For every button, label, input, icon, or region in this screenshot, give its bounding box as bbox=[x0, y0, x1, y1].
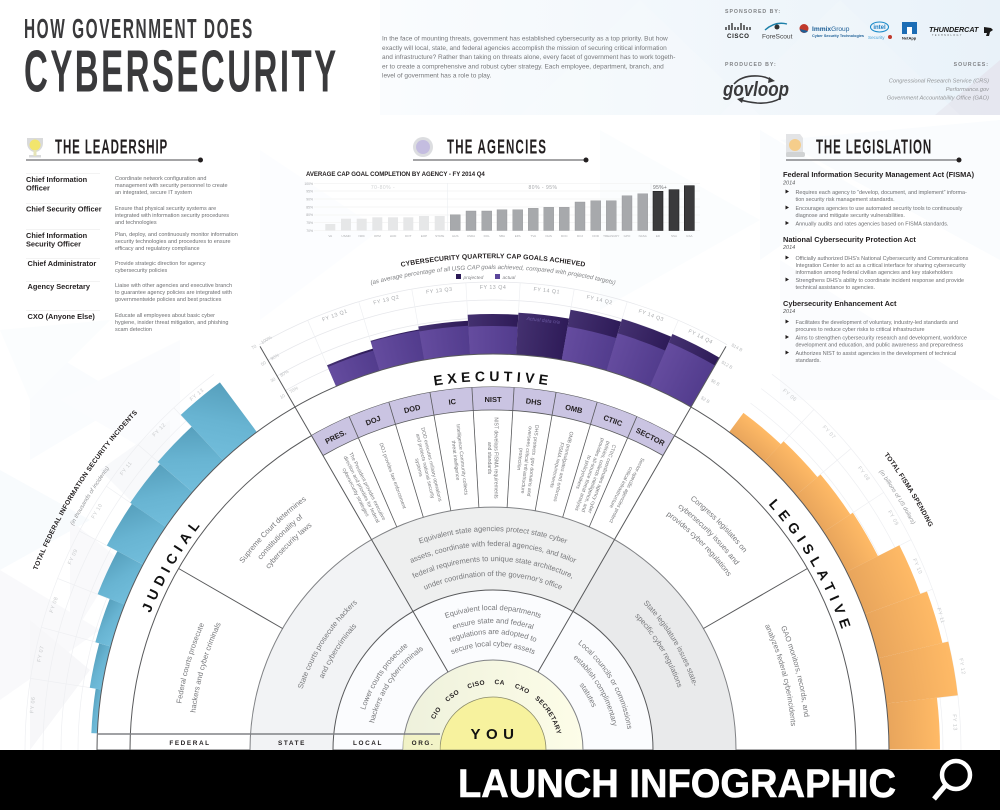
text: executive state: federal requirements to unique state architecture, bbox=[412, 556, 572, 579]
text: congress: Congress legislates on bbox=[691, 496, 746, 552]
heading: judicial: JUDICIAL bbox=[142, 524, 200, 612]
executive agency descriptions: and protects national security bbox=[414, 433, 435, 499]
executive agency descriptions: Intelligence Community collects bbox=[454, 424, 469, 496]
executive agency descriptions: DHS protects .gov domains and bbox=[525, 425, 540, 497]
leadership row: chief information security officer: Chief Information bbox=[26, 231, 88, 240]
bar chart: average cap goal completion: 70% bbox=[306, 229, 313, 233]
bar chart: average cap goal completion: 75% bbox=[306, 221, 313, 225]
act: fisma: 2014 bbox=[782, 180, 795, 186]
branch headings bbox=[142, 371, 850, 629]
sources: Government Accountability Office (GAO) bbox=[887, 96, 989, 102]
judicial year labels: FY 09 bbox=[67, 548, 79, 566]
judicial year labels: FY 06 bbox=[29, 696, 37, 713]
bar chart: average cap goal completion: 90% bbox=[306, 198, 313, 202]
bar chart: average cap goal completion: 95%+ bbox=[653, 185, 667, 191]
chart title: total federal information security incidents: TOTAL FEDERAL INFORMATION SECURITY INCIDENTS bbox=[32, 410, 137, 569]
intro paragraph: In the face of mounting threats, government has established cybersecurity as a top priority. But how bbox=[382, 36, 668, 42]
bar chart: average cap goal completion: DOL bbox=[484, 234, 490, 238]
judicial year labels: FY 13 bbox=[189, 387, 206, 403]
act: cybersecurity enhancement: development and education, and public awareness and preparedness bbox=[796, 342, 964, 348]
executive agency cell labels: DHS bbox=[525, 396, 542, 407]
quarter labels: FY 13 Q2 bbox=[373, 294, 400, 306]
leadership row: chief administrator bbox=[28, 259, 206, 274]
bar chart: average cap goal completion: NRC bbox=[358, 234, 366, 238]
text: state legislature: State legislature issues state- bbox=[644, 600, 696, 686]
axis labels bbox=[250, 335, 743, 406]
logo: thundercat bbox=[929, 25, 993, 37]
executive agency cell labels: SECTOR bbox=[634, 426, 667, 448]
axis labels: 70% bbox=[289, 385, 299, 394]
bar chart: average cap goal completion: VA bbox=[328, 234, 332, 238]
leadership row: cxo: hygiene, insider threat mitigation, and phishing bbox=[115, 320, 228, 326]
quarter labels: FY 14 Q4 bbox=[687, 329, 714, 346]
act: cybersecurity enhancement: Facilitates the development of voluntary, industry-led standards and bbox=[796, 320, 958, 326]
chart title: cybersecurity quarterly cap goals achieved: CYBERSECURITY QUARTERLY CAP GOALS ACHIEVED bbox=[400, 254, 585, 266]
bar chart: average cap goal completion: EOP bbox=[421, 234, 427, 238]
heading: the agencies: THE AGENCIES bbox=[447, 135, 547, 158]
executive agency descriptions: critical infrastructure bbox=[608, 466, 633, 509]
bar chart: average cap goal completion: USAID bbox=[341, 234, 351, 238]
sources: Performance.gov bbox=[946, 87, 990, 93]
bar chart: average cap goal completion: SSA bbox=[671, 234, 677, 238]
act: cybersecurity enhancement: Aims to strengthen cybersecurity research and development, workforce bbox=[796, 336, 967, 342]
organization role labels: CISO bbox=[468, 680, 484, 688]
executive agency descriptions: CTIIC coordinates agency cyber bbox=[586, 443, 617, 514]
logo: thundercat: TECHNOLOGY bbox=[932, 34, 963, 37]
quarter labels: FY 14 Q3 bbox=[637, 308, 665, 323]
executive agency descriptions: Sector-specific agencies protect bbox=[607, 457, 645, 524]
axis labels: $12 B bbox=[720, 360, 733, 370]
bar chart: average cap goal completion: SBA bbox=[499, 234, 505, 238]
leadership row: chief security officer bbox=[26, 204, 229, 226]
text: lower courts: hackers and cybercriminals bbox=[368, 647, 423, 723]
quarter labels: FY 13 Q1 bbox=[321, 308, 349, 323]
bar chart: average cap goal completion: NASA bbox=[639, 234, 647, 238]
leadership row: chief administrator: Provide strategic direction for agency bbox=[115, 261, 206, 267]
organization role labels: SECRETARY bbox=[533, 695, 562, 736]
logo: thundercat: THUNDERCAT bbox=[929, 25, 979, 34]
leadership row: agency secretary bbox=[28, 282, 232, 303]
chart: total federal information security incidents (blue) bbox=[89, 382, 260, 734]
quarter labels: FY 13 Q4 bbox=[480, 285, 506, 291]
level labels: LOCAL bbox=[353, 740, 383, 747]
leadership row: chief information officer: Chief Information bbox=[26, 175, 88, 184]
judicial year labels: FY 12 bbox=[152, 422, 167, 438]
text: local councils: establish complimentary bbox=[574, 656, 616, 726]
bar chart: average cap goal completion: 85% bbox=[306, 206, 313, 210]
bar chart: average cap goal completion: AVERAGE CAP GOAL COMPLETION BY AGENCY - FY 2014 Q4 bbox=[306, 171, 485, 178]
chart title: cybersecurity quarterly cap goals achieved: (as average percentage of all USG CAP goals achieved, compared with projected targets) bbox=[370, 264, 616, 286]
quarter labels: FY 14 Q1 bbox=[533, 287, 560, 296]
actual bars bbox=[328, 325, 715, 408]
leadership row: chief security officer: Chief Security Officer bbox=[26, 204, 102, 214]
text: executive local: regulations are adopted to bbox=[450, 630, 536, 642]
axis labels: $2 B bbox=[700, 395, 711, 404]
sources: SOURCES: bbox=[954, 62, 989, 68]
sources: Congressional Research Service (CRS) bbox=[889, 78, 989, 84]
text: gao bbox=[765, 624, 810, 726]
chart: quarterly cap goals (purple) bbox=[250, 285, 743, 409]
logo: immixgroup: ImmixGroup bbox=[812, 26, 850, 33]
text: federal courts bbox=[176, 622, 220, 712]
produced by: PRODUCED BY: bbox=[725, 62, 777, 68]
leadership row: cxo: scam detection bbox=[115, 327, 152, 333]
bar chart: average cap goal completion: DOT bbox=[405, 234, 412, 238]
bar chart: average cap goal completion: GSA bbox=[686, 234, 692, 238]
bar chart: average cap goal completion: USDA bbox=[467, 234, 475, 238]
sponsors bbox=[725, 9, 993, 40]
heading: executive: EXECUTIVE bbox=[434, 371, 548, 386]
organization ring bbox=[403, 660, 583, 750]
logo: intel security bbox=[868, 22, 892, 40]
level labels: FEDERAL bbox=[169, 740, 211, 747]
text: lower courts: Lower courts prosecute bbox=[360, 644, 408, 710]
executive agency label band bbox=[312, 387, 674, 456]
bar chart: average cap goal completion: DOC bbox=[561, 234, 568, 238]
chart title: total fisma spending: (in billions of US dollars) bbox=[878, 470, 916, 524]
chart title: cybersecurity quarterly cap goals achieved bbox=[370, 254, 616, 286]
judicial year labels: FY 11 bbox=[119, 461, 134, 477]
executive agency cell labels: NIST bbox=[484, 395, 502, 404]
chart: quarterly cap goals (purple): Actual data n/a bbox=[525, 316, 560, 326]
act: cybersecurity enhancement: 2014 bbox=[782, 309, 795, 315]
text: supreme court: constitutionality of bbox=[258, 514, 302, 560]
legend: projected and actual bbox=[456, 274, 516, 281]
bar chart: average cap goal completion: EPA bbox=[515, 234, 521, 238]
organization role labels: CXO bbox=[514, 683, 531, 696]
government rings bbox=[97, 354, 889, 750]
logo: forescout: ForeScout bbox=[762, 34, 793, 40]
axis labels: 100% bbox=[260, 335, 273, 345]
dividers bbox=[97, 346, 807, 734]
act: national cybersecurity protection: information among federal civilian agencies and key stakeholders bbox=[796, 270, 953, 276]
heading: legislative: LEGISLATIVE bbox=[768, 498, 850, 629]
leadership row: chief security officer: integrated with information security procedures bbox=[115, 213, 229, 219]
executive agency descriptions: oversees critical infrastructure bbox=[519, 426, 533, 494]
heading: the leadership: THE LEADERSHIP bbox=[55, 135, 168, 158]
bar chart: average cap goal completion: HHS bbox=[452, 234, 458, 238]
logo: netapp: NetApp bbox=[902, 36, 917, 40]
executive agency descriptions: policies, collects intelligence, and bbox=[580, 440, 611, 513]
you circle bbox=[440, 697, 546, 750]
text: supreme court: Supreme Court determines bbox=[240, 497, 306, 563]
bar chart: average cap goal completion: 95% bbox=[306, 190, 313, 194]
executive agency descriptions: to policymakers bbox=[574, 454, 592, 490]
executive agency cell labels: CTIIC bbox=[602, 413, 624, 428]
leadership row: agency secretary: to guarantee agency policies are integrated with bbox=[115, 290, 232, 296]
level labels: ORG. bbox=[412, 740, 434, 747]
bar chart: average cap goal completion bbox=[304, 171, 700, 238]
executive agency descriptions: NIST develops FISMA requirements bbox=[492, 417, 498, 499]
text: local councils: Local councils or commissions bbox=[578, 640, 632, 729]
act: cybersecurity enhancement: Authorizes NIST to assist agencies in the development of technical bbox=[796, 351, 956, 357]
panel: the legislation bbox=[782, 134, 975, 364]
title: CYBERSECURITY bbox=[24, 40, 339, 105]
logo: intel security: Security bbox=[868, 35, 885, 40]
act: national cybersecurity protection: 2014 bbox=[782, 245, 795, 251]
act: fisma: diagnose and mitigate security vulnerabilities. bbox=[796, 213, 905, 219]
leadership row: cxo: Educate all employees about basic cyber bbox=[115, 313, 215, 319]
text: executive state: Equivalent state agencies protect state cyber bbox=[418, 526, 568, 544]
leadership row: chief administrator: cybersecurity policies bbox=[115, 268, 168, 274]
icon: scroll bbox=[786, 134, 805, 157]
judicial year labels: FY 07 bbox=[36, 645, 46, 663]
leadership row: chief information officer bbox=[26, 175, 228, 196]
panel: the leadership bbox=[26, 135, 238, 333]
executive agency cell labels bbox=[324, 395, 667, 448]
executive agency descriptions: DOD executes military operations bbox=[419, 427, 443, 503]
act: fisma: Encourages agencies to use automated security tools to continuously bbox=[796, 206, 963, 212]
legislative year labels bbox=[781, 388, 966, 731]
executive agency cell labels: DOJ bbox=[364, 414, 382, 428]
text: executive local: secure local cyber assets bbox=[451, 640, 535, 654]
bar chart: average cap goal completion: DOJ bbox=[577, 234, 584, 238]
act: fisma: tion security risk management standards. bbox=[796, 197, 895, 203]
judicial year labels bbox=[29, 387, 206, 713]
text: congress: provides cyber regulations bbox=[666, 512, 730, 576]
executive agency cell labels: PRES. bbox=[324, 428, 348, 446]
act: cybersecurity enhancement: standards. bbox=[796, 358, 821, 364]
leadership row: chief information security officer bbox=[26, 231, 238, 252]
leadership row: chief information officer: Coordinate network configuration and bbox=[115, 176, 206, 182]
axis labels: 50 bbox=[260, 360, 267, 367]
legislative year labels: FY 10 bbox=[911, 558, 923, 575]
panel: the agencies bbox=[304, 135, 700, 238]
local ring bbox=[333, 590, 653, 750]
sources bbox=[887, 62, 990, 102]
logo: forescout bbox=[762, 23, 793, 40]
state ring bbox=[250, 507, 736, 750]
executive agency descriptions: protection bbox=[515, 448, 524, 471]
bar chart: average cap goal completion: 100% bbox=[304, 182, 313, 186]
executive agency descriptions: DOJ provides law enforcement bbox=[377, 442, 407, 510]
leadership row: chief security officer: Ensure that physical security systems are bbox=[115, 206, 216, 212]
quarter labels bbox=[321, 285, 714, 346]
you label: YOU bbox=[470, 726, 520, 743]
chart title: total federal information security incidents: (in thousands of incidents) bbox=[70, 466, 110, 526]
executive agency descriptions: systems bbox=[413, 458, 424, 478]
leadership row: cxo bbox=[28, 312, 228, 333]
text: gao: GAO monitors, records, and bbox=[782, 626, 810, 717]
leadership row: chief information officer: Officer bbox=[26, 184, 50, 192]
bar chart: average cap goal completion: 80% - 95% bbox=[529, 185, 558, 191]
text: federal courts: Federal courts prosecute bbox=[176, 623, 204, 704]
text: local councils: statutes bbox=[580, 683, 596, 708]
executive agency descriptions bbox=[336, 417, 645, 528]
chart grids bbox=[25, 282, 961, 750]
executive agency cell labels: OMB bbox=[564, 403, 584, 415]
act: national cybersecurity protection bbox=[782, 235, 969, 291]
act: cybersecurity enhancement bbox=[782, 299, 967, 364]
text: executive state: assets, coordinate with federal agencies, and tailor bbox=[410, 540, 576, 563]
bar chart: average cap goal completion: STATE bbox=[435, 234, 444, 238]
leadership row: chief information officer: an integrated, secure IT system bbox=[115, 190, 192, 196]
organization role labels: CA bbox=[494, 680, 504, 685]
legend: projected and actual: projected bbox=[462, 275, 484, 281]
act: national cybersecurity protection: National Cybersecurity Protection Act bbox=[783, 235, 916, 244]
legislative year labels: FY 09 bbox=[886, 510, 899, 527]
act: cybersecurity enhancement: Cybersecurity Enhancement Act bbox=[783, 299, 897, 308]
produced by bbox=[722, 62, 789, 103]
act: fisma: Annually audits and rates agencies based on FISMA standards. bbox=[796, 222, 949, 228]
executive agency descriptions: direction and priorities for federal bbox=[342, 455, 380, 524]
act: fisma bbox=[782, 170, 975, 228]
bar chart: average cap goal completion: DOD bbox=[592, 234, 600, 238]
intro paragraph: and infrastructure? Rather than taking on threats alone, every facet of government has to work togeth- bbox=[382, 54, 675, 61]
act: national cybersecurity protection: technical assistance to agencies. bbox=[796, 285, 875, 291]
bar chart: average cap goal completion: TREASURY bbox=[603, 234, 619, 238]
executive agency descriptions: OMB promulgates and enforces bbox=[551, 431, 574, 503]
text: executive local bbox=[444, 604, 541, 654]
act: national cybersecurity protection: Strengthens DHS's ability to coordinate incident response and provide bbox=[796, 278, 964, 284]
leadership row: chief information security officer: Security Officer bbox=[26, 240, 81, 248]
logo: netapp bbox=[902, 22, 917, 40]
leadership row: chief information security officer: Plan, deploy, and continuously monitor information bbox=[115, 232, 238, 238]
axis labels: 70 bbox=[250, 343, 258, 350]
radial diagram bbox=[24, 254, 966, 750]
title: HOW GOVERNMENT DOES bbox=[24, 13, 254, 44]
executive agency descriptions: FISMA requirements bbox=[548, 442, 565, 489]
leadership row: chief information officer: management with security personnel to create bbox=[115, 183, 228, 189]
text: executive local: Equivalent local departments bbox=[444, 604, 541, 618]
quarter labels: FY 14 Q2 bbox=[586, 294, 613, 306]
heading: the legislation: THE LEGISLATION bbox=[816, 135, 932, 158]
axis labels: 90% bbox=[270, 352, 280, 361]
logo: immixgroup bbox=[800, 24, 864, 38]
leadership row: chief information security officer: efficacy and regulatory compliance bbox=[115, 246, 200, 252]
legislative year labels: FY 13 bbox=[951, 714, 958, 731]
launch bar bbox=[0, 750, 1000, 810]
axis labels: 30 bbox=[269, 376, 277, 383]
icon: magnifier bbox=[934, 761, 970, 799]
sponsors: SPONSORED BY: bbox=[725, 9, 781, 15]
intro paragraph: level of government has a role to play. bbox=[382, 72, 492, 80]
axis labels: 80% bbox=[279, 369, 290, 378]
legislative year labels: FY 07 bbox=[821, 424, 837, 441]
judicial year labels: FY 10 bbox=[91, 503, 104, 520]
text: executive local: ensure state and federal bbox=[452, 618, 534, 630]
axis labels: $6 B bbox=[710, 378, 721, 387]
text: congress bbox=[666, 496, 746, 576]
intro paragraph: exactly will local, state, and federal agencies accomplish the mission of securing critical information bbox=[382, 45, 667, 52]
leadership row: agency secretary: Agency Secretary bbox=[28, 282, 91, 291]
chart title: total fisma spending: TOTAL FISMA SPENDING bbox=[885, 452, 933, 526]
leadership row: cxo: CXO (Anyone Else) bbox=[28, 312, 95, 321]
axis labels: 10 bbox=[279, 393, 286, 400]
logo: cisco bbox=[726, 23, 750, 40]
executive agency descriptions: threat intelligence bbox=[450, 440, 460, 481]
chart: total fisma spending (orange) bbox=[728, 412, 959, 753]
quarter labels: FY 13 Q3 bbox=[426, 287, 453, 296]
text: supreme court: cybersecurity laws bbox=[266, 524, 312, 568]
logo: govloop: govloop bbox=[722, 79, 789, 101]
logo: immixgroup: Cyber Security Technologies bbox=[812, 34, 864, 38]
legislative year labels: FY 06 bbox=[781, 388, 798, 403]
organization role labels: CSO bbox=[446, 690, 458, 702]
bar chart: average cap goal completion: DHS bbox=[546, 234, 552, 238]
text: gao: analyzes federal cyberincidents bbox=[765, 624, 796, 726]
projected bars bbox=[327, 309, 720, 409]
legislative year labels: FY 12 bbox=[957, 658, 966, 675]
executive agency descriptions: and standards bbox=[486, 442, 492, 475]
act: fisma: Federal Information Security Management Act (FISMA) bbox=[783, 170, 975, 179]
bar chart: average cap goal completion: 80% bbox=[306, 213, 313, 217]
bar chart: average cap goal completion: TVA bbox=[530, 234, 536, 238]
executive agency cell labels: IC bbox=[448, 397, 457, 407]
text: congress: cybersecurity issues and bbox=[678, 504, 740, 565]
leadership row: agency secretary: Liaise with other agencies and executive branch bbox=[115, 283, 232, 289]
bar chart: average cap goal completion: OPM bbox=[374, 234, 381, 238]
level labels: STATE bbox=[278, 740, 306, 747]
text: executive state: under coordination of the governor's office bbox=[424, 570, 562, 590]
executive agency descriptions: cybersecurity strategies bbox=[341, 467, 370, 518]
act: cybersecurity enhancement: procures to reduce cyber risks to critical infrastructure bbox=[796, 327, 925, 333]
bar chart: average cap goal completion: 70-80% - bbox=[371, 185, 395, 191]
icon: seal bbox=[413, 137, 433, 157]
executive agency descriptions: The President provides executive bbox=[347, 452, 387, 522]
judicial year labels: FY 08 bbox=[49, 596, 60, 614]
legend: projected and actual: actual bbox=[502, 275, 516, 281]
executive agency descriptions: provides all-source threat analysis bbox=[573, 437, 605, 512]
text: state courts: and cybercriminals bbox=[320, 624, 356, 678]
axis labels: $14 B bbox=[730, 342, 743, 353]
legislative year labels: FY 08 bbox=[856, 465, 871, 482]
intro paragraph bbox=[382, 36, 675, 80]
bar chart: average cap goal completion: HUD bbox=[390, 234, 397, 238]
organization role labels: CIO bbox=[431, 708, 440, 719]
launch label: LAUNCH INFOGRAPHIC bbox=[458, 762, 896, 806]
leadership row: chief security officer: and technologies bbox=[115, 220, 157, 226]
bar chart: average cap goal completion: GPO bbox=[624, 234, 631, 238]
act: national cybersecurity protection: Integration Center to act as a critical interface for sharing cybersecurity bbox=[796, 263, 966, 269]
level labels bbox=[169, 735, 440, 750]
act: national cybersecurity protection: Officially authorized DHS's National Cybersecurity and Communications bbox=[796, 256, 969, 262]
text: federal courts: hackers and cyber criminals bbox=[190, 622, 220, 712]
text: state courts: State courts prosecute hackers bbox=[298, 600, 357, 688]
logo: intel security: intel bbox=[873, 25, 886, 31]
leadership row: agency secretary: governmentwide policies and best practices bbox=[115, 297, 222, 303]
text: executive state bbox=[410, 526, 576, 590]
act: fisma: Requires each agency to “develop, document, and implement” informa- bbox=[796, 190, 967, 196]
icon: trophy bbox=[27, 138, 43, 158]
executive agency cell labels: DOD bbox=[403, 403, 422, 415]
leadership row: chief administrator: Chief Administrator bbox=[28, 259, 96, 268]
intro paragraph: er to create a comprehensive and robust cyber strategy. Each employee, department, branch, and bbox=[382, 64, 664, 70]
text: state legislature: specific cyber regulations bbox=[635, 614, 682, 688]
leadership row: chief information security officer: security technologies and procedures to ensure bbox=[115, 239, 231, 245]
legislative year labels: FY 11 bbox=[935, 607, 945, 624]
logo: cisco: CISCO bbox=[727, 33, 750, 40]
organization role labels bbox=[431, 680, 562, 734]
bar chart: average cap goal completion: ED bbox=[656, 234, 661, 238]
